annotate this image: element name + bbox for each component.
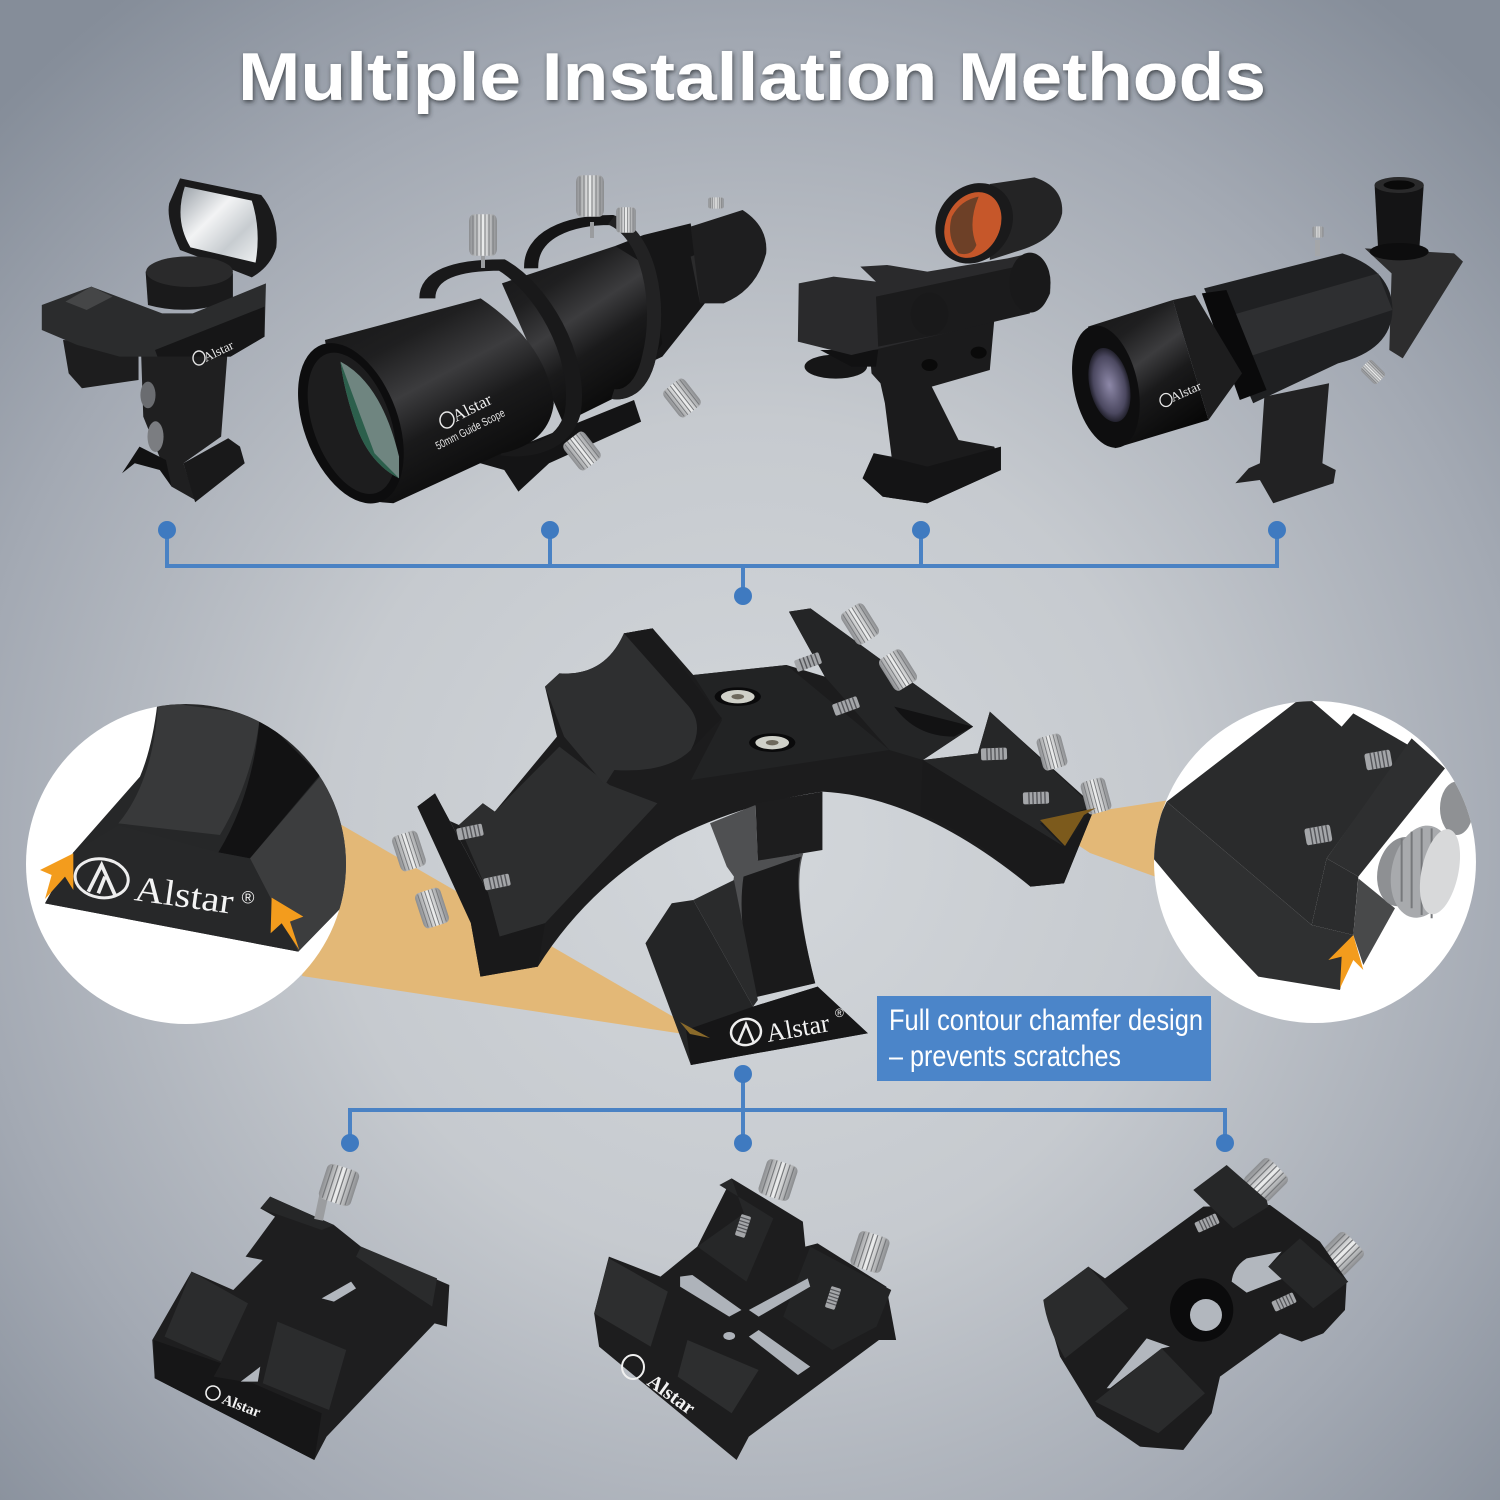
front knob: [1377, 837, 1406, 906]
finder knobs: [1312, 226, 1386, 385]
foot: [693, 880, 758, 1007]
first ring: [427, 265, 574, 451]
product: red dot finder: [42, 178, 277, 502]
rear knob: [1440, 782, 1473, 835]
base: [469, 400, 641, 492]
threaded screws: [1304, 749, 1393, 846]
wheel: [805, 355, 867, 379]
top right knobs: [794, 601, 919, 716]
central dovetail saddle: [391, 601, 1113, 1065]
screws: [1194, 1213, 1297, 1312]
left knobs: [391, 823, 511, 930]
slots: [322, 1282, 356, 1302]
scope label: Alstar: [449, 390, 495, 426]
callout beam: right: [1040, 800, 1170, 882]
blocks: [165, 1272, 248, 1362]
chamfer: [1145, 802, 1353, 990]
body: [42, 283, 266, 357]
red dot brand: Alstar: [201, 337, 236, 365]
clamp: left: [152, 1162, 449, 1460]
arrow: right: [271, 898, 303, 950]
callout beam: left: [302, 824, 710, 1038]
arrow: chamfer: [1328, 935, 1363, 988]
rear focuser: [615, 223, 705, 370]
brand: Alstar: [132, 868, 236, 922]
knobs: [735, 1158, 891, 1310]
body: [594, 1178, 896, 1460]
product: right-angle finder scope: [1063, 177, 1463, 503]
plate: [1327, 738, 1445, 877]
hood: [325, 298, 554, 503]
clamp: center: [594, 1158, 896, 1460]
inner face: [1167, 695, 1408, 925]
main tube: [1204, 253, 1392, 403]
right cup: [789, 608, 973, 760]
dovetail foot: [122, 447, 172, 487]
slots: [1232, 1252, 1283, 1293]
bracket: [863, 320, 1001, 503]
callout label: [877, 996, 1211, 1081]
knobs: [1242, 1156, 1366, 1278]
second ring: [531, 220, 654, 394]
stem: [141, 340, 228, 500]
blocks: [1193, 1165, 1268, 1228]
clamp brand: Alstar: [643, 1370, 699, 1419]
slots: [680, 1275, 741, 1317]
knob wheel: [63, 340, 139, 388]
body: [798, 253, 1050, 355]
knob: [317, 1162, 361, 1208]
right face: [250, 777, 353, 952]
cup face: [118, 702, 260, 835]
callout circle: left detail: [26, 695, 360, 1024]
right wing: [923, 712, 1093, 847]
dial: [146, 260, 233, 310]
reflector window: [169, 178, 277, 277]
lens: [341, 362, 399, 478]
product: reflex finder: [798, 177, 1062, 503]
objective barrel: [1088, 300, 1209, 448]
stem: [710, 805, 815, 997]
eyepiece: [1375, 185, 1424, 250]
clamp brand: [622, 1355, 699, 1419]
left cup: [545, 628, 722, 785]
clamp: right: [1043, 1156, 1366, 1450]
callout label: Full contour chamfer design: [889, 1004, 1203, 1037]
bracket stem: [1235, 383, 1336, 503]
hex bolts: [715, 687, 761, 706]
centre plate: [691, 665, 889, 780]
right knobs: [981, 733, 1113, 815]
neck: [1202, 290, 1267, 400]
foot logo: [729, 1006, 844, 1048]
beam overlap right: [1040, 808, 1096, 846]
screw: [314, 1191, 329, 1221]
beam overlap left: [680, 1022, 710, 1038]
front rail: [154, 1340, 322, 1460]
product: 50mm guide scope: [280, 175, 766, 510]
callout circle: left detail: ®: [242, 887, 255, 907]
finder brand: Alstar: [1168, 378, 1204, 405]
body: [152, 1197, 449, 1460]
objective rim: [280, 336, 422, 510]
left wing face: [459, 747, 657, 937]
upper connector bracket: [158, 521, 1286, 605]
scope label: 50mm Guide Scope: [434, 407, 507, 453]
logo: [73, 855, 131, 901]
callout circle: right detail: [1145, 695, 1476, 1023]
countersunk hole: [1170, 1278, 1233, 1342]
sight tube: [926, 177, 1062, 269]
main tube: [502, 246, 662, 423]
clamp brand: [206, 1386, 263, 1421]
body: [1043, 1205, 1347, 1450]
title: Multiple Installation Methods: [238, 39, 1266, 115]
foot logo: ®: [835, 1006, 844, 1020]
slot: [218, 715, 320, 858]
front face: [45, 852, 298, 952]
callout label: – prevents scratches: [889, 1040, 1121, 1073]
top plate: [260, 1197, 334, 1230]
left plate: [417, 793, 545, 977]
lower connector bracket: [341, 1065, 1234, 1152]
blocks: [594, 1258, 668, 1347]
prism: [1365, 248, 1463, 358]
foot logo: Alstar: [764, 1008, 832, 1048]
arch body: [417, 608, 1095, 977]
scope knobs: [469, 175, 724, 472]
clamp brand: Alstar: [220, 1392, 263, 1421]
arrow: left: [40, 853, 73, 899]
